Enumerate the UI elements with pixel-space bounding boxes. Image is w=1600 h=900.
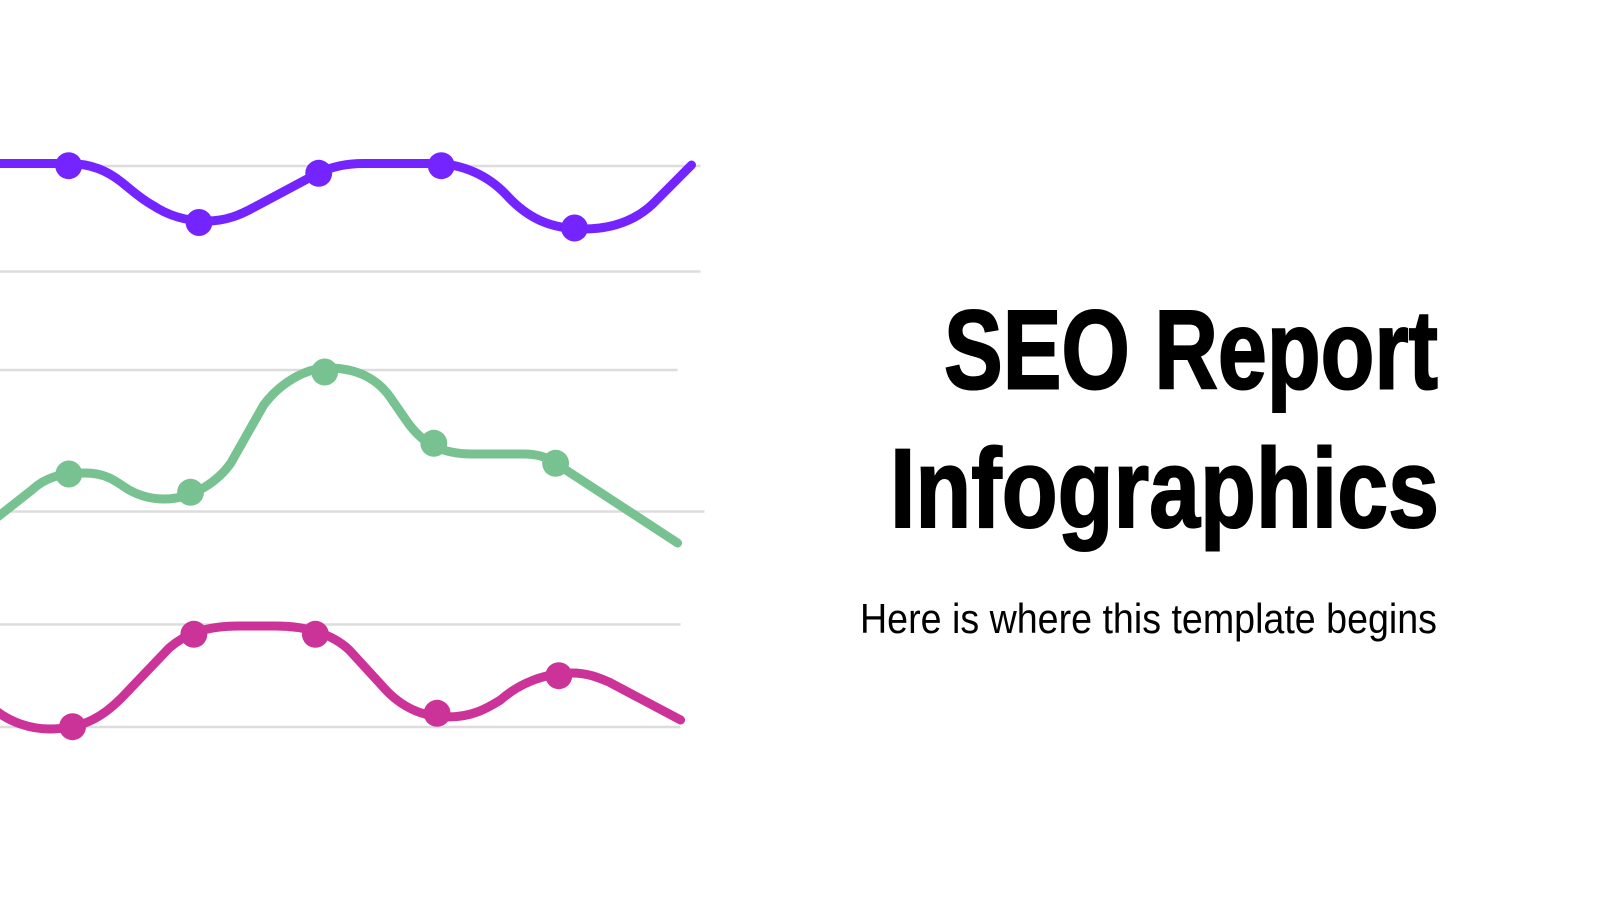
line chart: green series <box>0 358 678 543</box>
title: Infographics <box>890 426 1439 551</box>
line chart: pink series <box>0 621 681 740</box>
title <box>890 288 1439 551</box>
line chart: purple series <box>0 152 692 242</box>
subtitle: Here is where this template begins <box>860 595 1437 642</box>
title: SEO Report <box>944 288 1438 412</box>
